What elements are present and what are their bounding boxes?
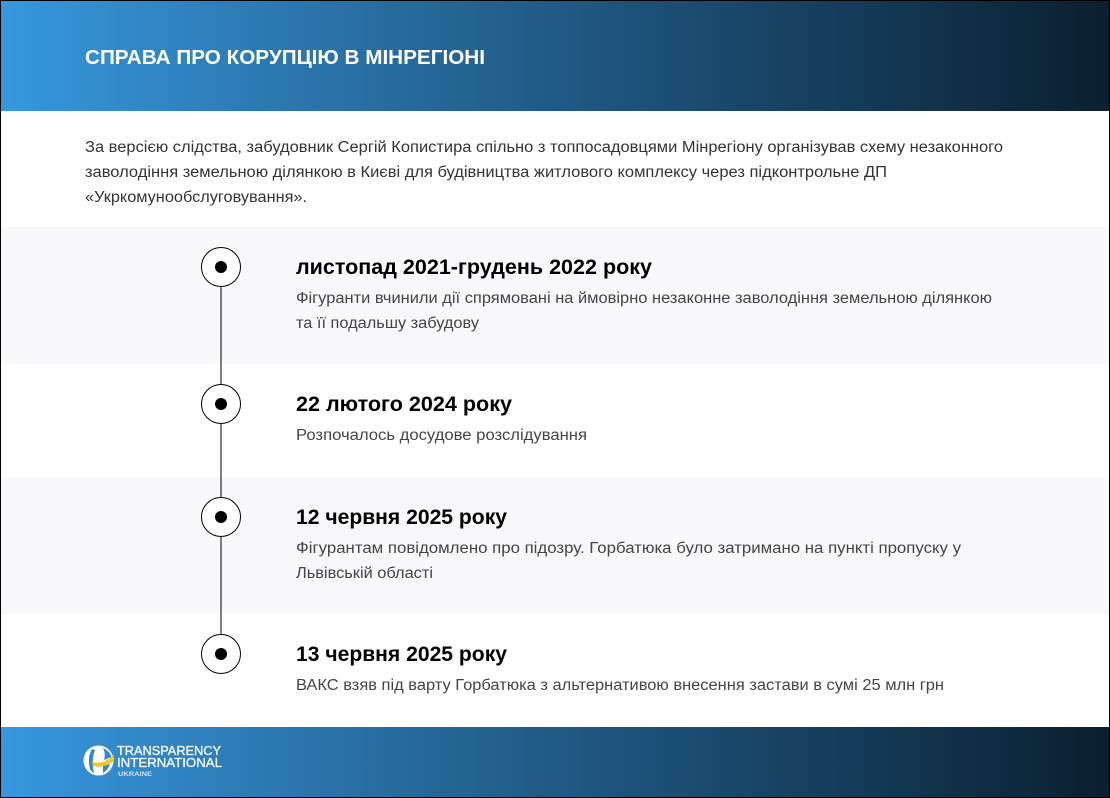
timeline marker 3 — [202, 498, 240, 536]
timeline marker 1 — [202, 248, 240, 286]
title: СПРАВА ПРО КОРУПЦІЮ В МІНРЕГІОНІ — [85, 46, 485, 69]
row 3 background — [0, 477, 1110, 614]
event 3 — [296, 506, 961, 582]
logo wordmark: TRANSPARENCY — [117, 744, 222, 758]
event 2: Розпочалось досудове розслідування — [296, 427, 587, 444]
logo wordmark — [117, 744, 222, 778]
row 1 background — [0, 227, 1110, 364]
event 1: листопад 2021-грудень 2022 року — [296, 256, 652, 279]
timeline line — [220, 267, 222, 654]
header band — [0, 0, 1110, 111]
intro text — [85, 139, 1003, 206]
event 4: ВАКС взяв під варту Горбатюка з альтернативою внесення застави в сумі 25 млн грн — [296, 677, 944, 694]
timeline marker 2 — [202, 384, 240, 424]
intro text: За версією слідства, забудовник Сергій Копистира спільно з топпосадовцями Мінрегіону організував схему незаконного — [85, 139, 1003, 156]
event 3: Фігурантам повідомлено про підозру. Горбатюка було затримано на пункті пропуску у — [296, 540, 961, 557]
logo wordmark: UKRAINE — [118, 771, 153, 778]
event 2: 22 лютого 2024 року — [296, 393, 512, 416]
timeline marker 4 — [202, 634, 240, 674]
event 1: та її подальшу забудову — [296, 315, 479, 332]
intro text: заволодіння земельною ділянкою в Києві для будівництва житлового комплексу через підконтрольне ДП — [85, 164, 887, 181]
event 4 — [296, 643, 944, 694]
logo wordmark: INTERNATIONAL — [117, 756, 222, 770]
event 4: 13 червня 2025 року — [296, 643, 507, 666]
event 2 — [296, 393, 587, 444]
event 3: 12 червня 2025 року — [296, 506, 507, 529]
event 1 — [296, 256, 992, 332]
logo: Transparency International Ukraine — [84, 744, 222, 778]
event 1: Фігуранти вчинили дії спрямовані на ймовірно незаконне заволодіння земельною ділянкою — [296, 290, 992, 307]
event 3: Львівській області — [296, 565, 433, 582]
icon: logo emblem — [84, 746, 114, 776]
footer band — [0, 727, 1110, 798]
intro text: «Укркомунообслуговування». — [85, 189, 307, 206]
